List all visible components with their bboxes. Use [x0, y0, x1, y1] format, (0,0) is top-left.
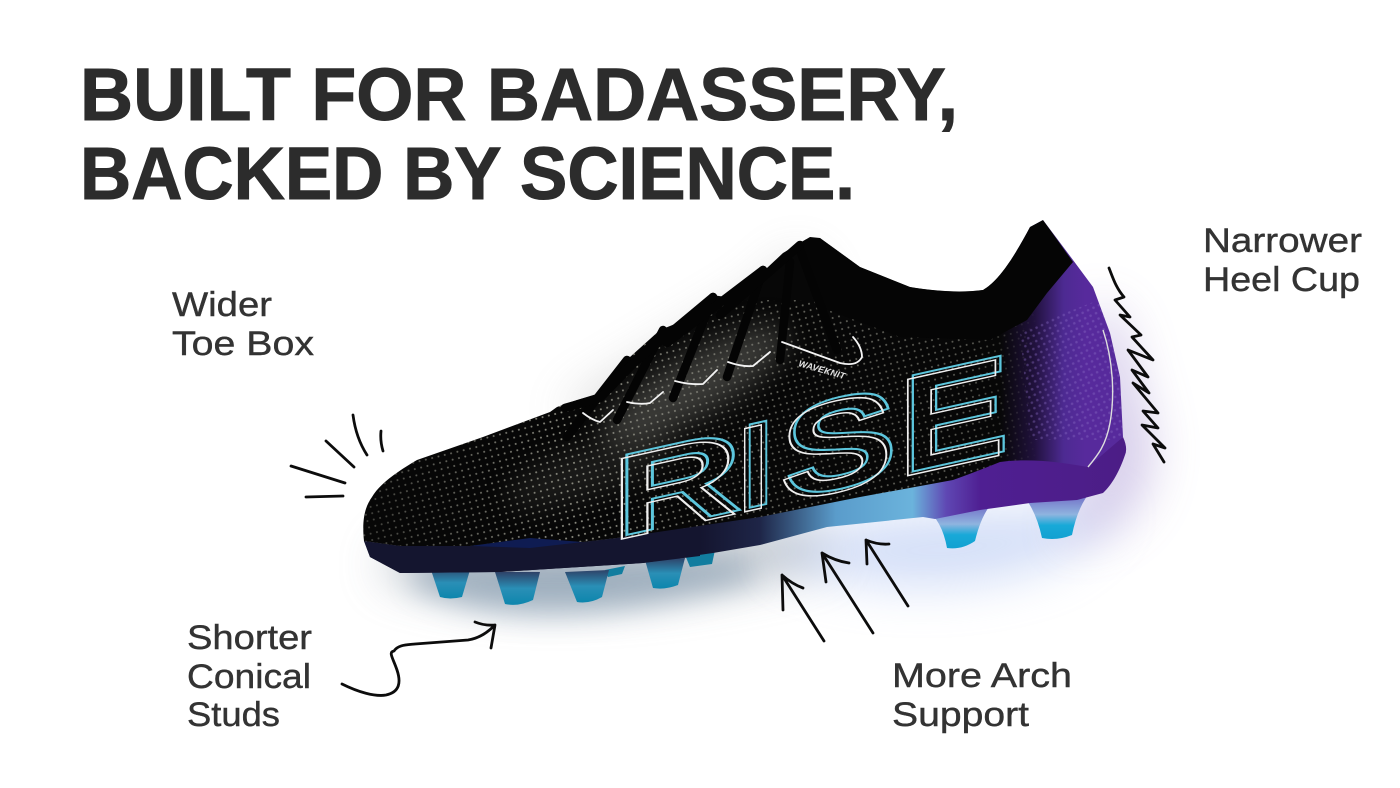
shoe — [360, 220, 1126, 605]
upper dot texture — [360, 220, 1125, 570]
title — [80, 53, 958, 215]
RISE lettering: I — [742, 393, 774, 535]
label: narrower heel cup — [1203, 222, 1362, 299]
label: shorter conical studs — [187, 619, 312, 734]
doodle: arch arrows — [782, 540, 908, 641]
RISE lettering: I — [737, 397, 769, 539]
midsole front dark — [364, 525, 700, 573]
swoosh marks — [583, 337, 862, 422]
label: narrower heel cup: Narrower — [1203, 222, 1362, 260]
label: more arch support — [892, 657, 1072, 734]
midsole — [364, 437, 1126, 573]
label: shorter conical studs: Studs — [187, 696, 280, 734]
RISE lettering: R — [615, 404, 743, 563]
label: wider toe box: Toe Box — [172, 325, 314, 363]
RISE lettering: E — [897, 329, 1005, 509]
label: shorter conical studs: Shorter — [187, 619, 312, 657]
collar knit — [800, 220, 1073, 340]
shoe soft shadow and glow — [380, 250, 1152, 616]
label: wider toe box — [172, 286, 314, 363]
doodle: squiggle arrow — [342, 622, 495, 695]
label: more arch support: More Arch — [892, 657, 1072, 695]
laces — [565, 245, 837, 437]
RISE lettering: S — [779, 361, 893, 532]
doodle: heel zigzag — [1109, 268, 1165, 462]
title: BUILT FOR BADASSERY, — [80, 53, 958, 136]
upper — [363, 220, 1123, 546]
RISE lettering: S — [784, 357, 898, 528]
label: more arch support: Support — [892, 696, 1030, 734]
RISE lettering: R — [610, 409, 738, 567]
heel seam — [1088, 330, 1113, 467]
label: wider toe box: Wider — [172, 286, 272, 324]
label: narrower heel cup: Heel Cup — [1203, 261, 1360, 299]
RISE lettering — [610, 325, 1010, 572]
title: BACKED BY SCIENCE. — [80, 132, 855, 215]
midsole front navy patch — [470, 536, 583, 548]
waveknit label: WAVEKNIT — [797, 358, 848, 382]
RISE lettering: E — [902, 325, 1010, 505]
label: shorter conical studs: Conical — [187, 658, 311, 696]
doodle: toe lines — [291, 415, 383, 497]
front studs — [430, 550, 715, 605]
back studs — [925, 490, 1092, 548]
